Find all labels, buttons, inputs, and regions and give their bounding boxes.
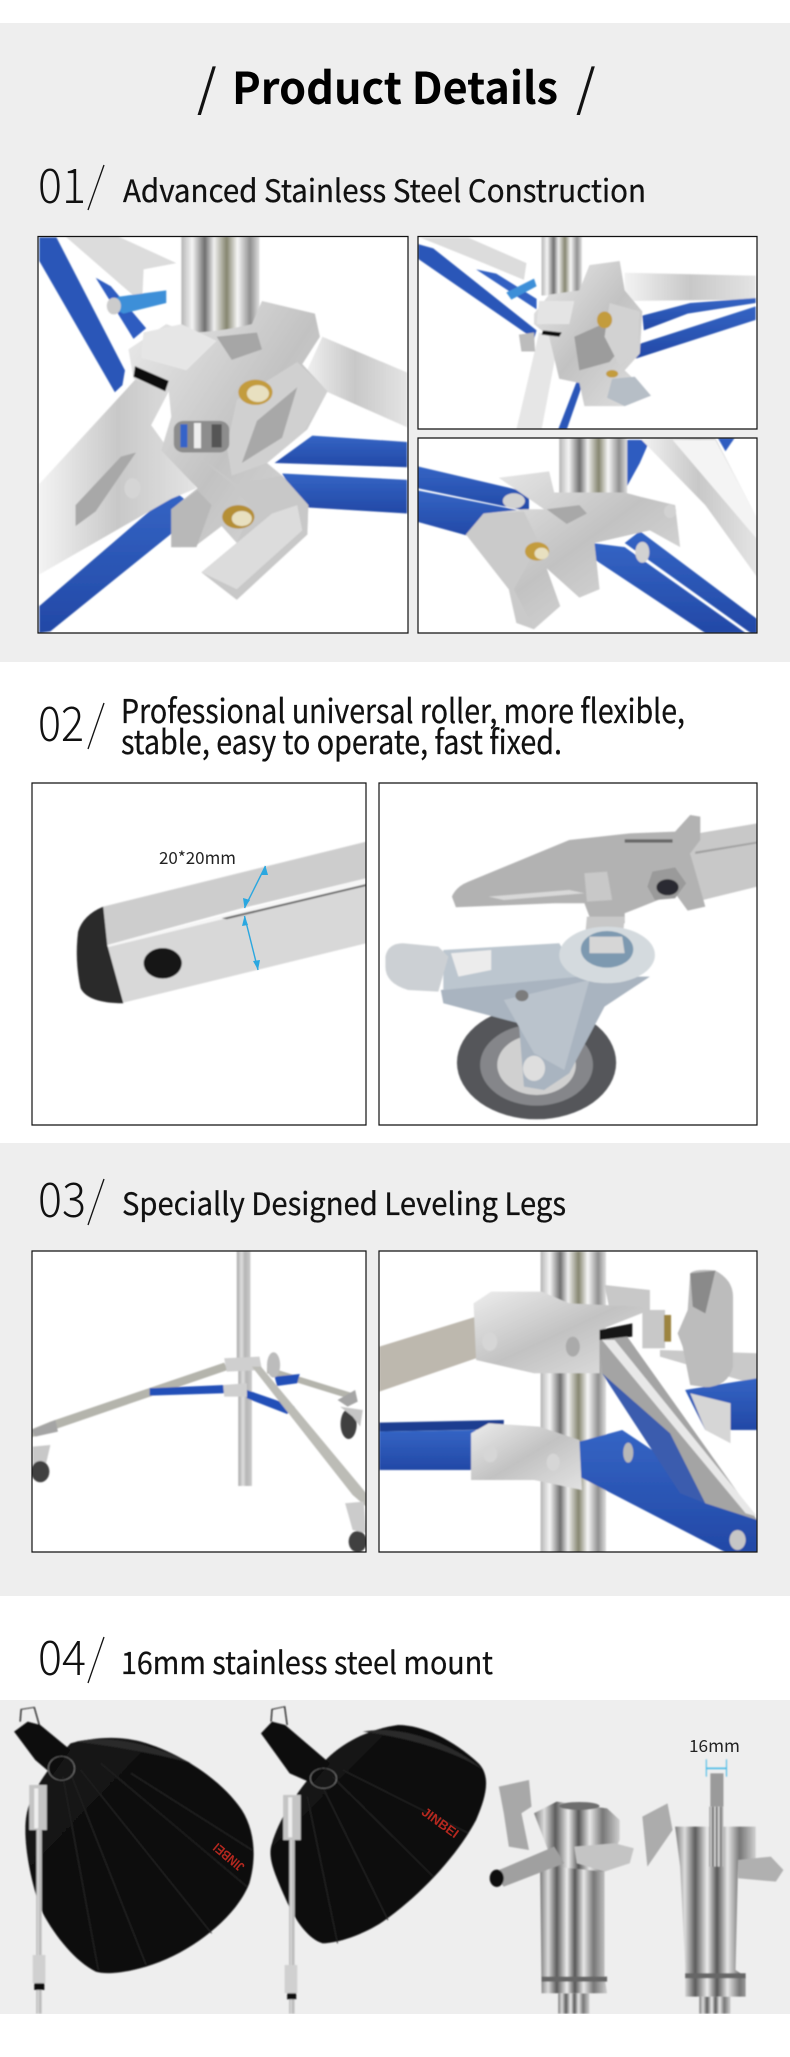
softbox right [261, 1707, 486, 2014]
section 4: 16mm stainless steel mount [0, 1619, 790, 2014]
label: 16mm: 16mm [689, 1732, 740, 1757]
panel: clamp head from above [418, 236, 757, 429]
heading 01 [38, 147, 646, 217]
heading 02: Professional universal roller, more flexible, [121, 685, 685, 733]
mount with spigot, front view [642, 1759, 783, 2014]
heading 03: Specially Designed Leveling Legs [122, 1179, 566, 1224]
panel: square tube leg 20*20mm [32, 783, 366, 1125]
heading 04: 16mm stainless steel mount [121, 1638, 493, 1683]
heading 01: Advanced Stainless Steel Construction [123, 166, 646, 211]
dimension arrows [242, 866, 268, 970]
brand text on left softbox: JINBEI [210, 1840, 247, 1875]
label: 20*20mm: 20*20mm [159, 844, 236, 869]
heading 03 [38, 1161, 566, 1231]
softbox left [14, 1707, 254, 2014]
title: product details: / [197, 49, 217, 121]
mount with spigot, angled view [490, 1780, 634, 2014]
heading 02: 02 [38, 685, 84, 755]
panel: clamp head from below [418, 438, 757, 633]
heading 04 [38, 1619, 493, 1689]
section 3: leveling legs [0, 1143, 790, 1596]
panel: leg clamp close-up [379, 1251, 757, 1552]
panel: locking caster wheel [379, 783, 757, 1125]
heading 01: 01 [38, 147, 86, 217]
section 1: advanced stainless steel construction [0, 23, 790, 662]
photo band: softboxes and mounts [0, 1700, 790, 2014]
heading 04: 04 [38, 1619, 86, 1689]
title: product details: Product Details [232, 53, 558, 117]
brand text on right softbox: JINBEI [419, 1804, 462, 1841]
panel: clamp head close-up large [38, 236, 408, 633]
heading 02: stable, easy to operate, fast fixed. [121, 716, 562, 764]
panel: full tripod base [31, 1251, 367, 1552]
section 2: universal roller [32, 685, 757, 1125]
heading 03: 03 [38, 1161, 86, 1231]
heading 02 [38, 685, 685, 764]
title: product details: / [576, 49, 596, 121]
